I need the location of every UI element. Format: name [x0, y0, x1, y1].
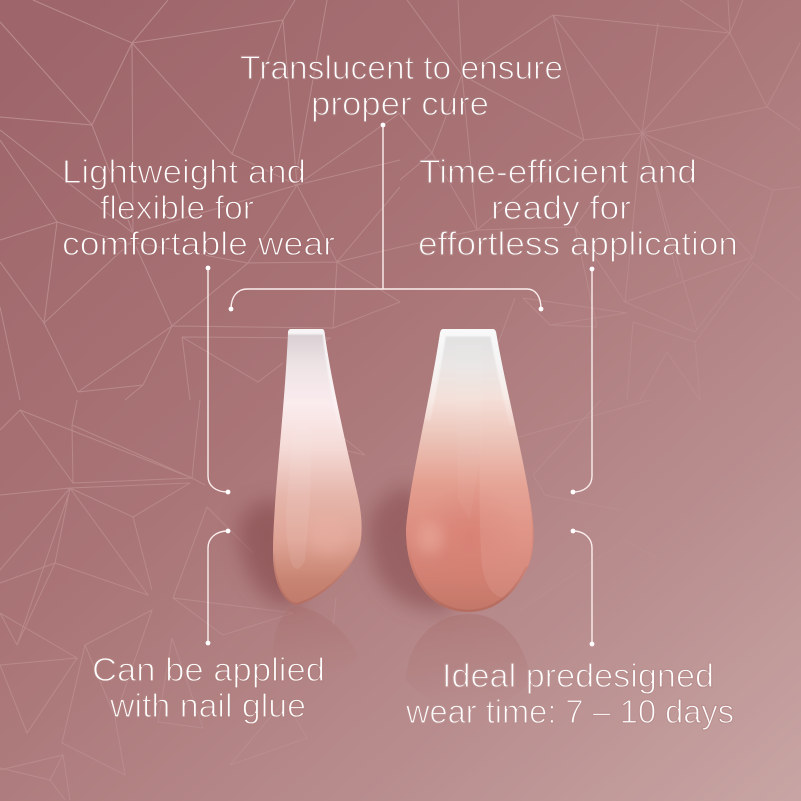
- text: time-efficient: effortless application: [418, 225, 738, 262]
- text: wear time: Ideal predesigned: [442, 657, 714, 694]
- connector: upper left: [208, 268, 228, 492]
- text: time-efficient: ready for: [491, 189, 631, 226]
- connector dots: [206, 123, 594, 646]
- connector lines: [208, 125, 592, 644]
- text: translucent: Translucent to ensure: [240, 49, 563, 86]
- text: translucent: proper cure: [311, 85, 489, 122]
- text: lightweight: Lightweight and: [62, 153, 306, 190]
- nail body: [406, 329, 534, 612]
- shadow behind right nail: [368, 485, 452, 612]
- text: wear time: wear time: 7 – 10 days: [405, 693, 734, 730]
- text: nail glue: [92, 651, 325, 724]
- reflection: left nail: [273, 606, 358, 674]
- text: lightweight: flexible for: [100, 189, 254, 226]
- text: time-efficient: [418, 153, 738, 262]
- connector: lower left: [208, 531, 228, 643]
- shadow behind left nail: [238, 500, 301, 606]
- highlight: centre band: [455, 345, 483, 520]
- connector: upper right: [573, 269, 592, 492]
- reflection: right nail: [406, 614, 531, 710]
- text: translucent: [240, 49, 563, 122]
- connector: lower right: [573, 531, 592, 644]
- connector: top: [382, 125, 384, 289]
- lower rim: [274, 562, 352, 605]
- glossy bevel on edge: [288, 329, 339, 412]
- text: lightweight: comfortable wear: [62, 225, 335, 262]
- text: nail glue: with nail glue: [109, 687, 306, 724]
- highlight: [286, 425, 312, 569]
- highlight: lower right facet: [480, 400, 532, 598]
- nail body: [273, 329, 362, 605]
- right nail: [406, 329, 534, 612]
- text: nail glue: Can be applied: [92, 651, 325, 688]
- text: lightweight: [62, 153, 335, 262]
- glow: [310, 515, 346, 555]
- glossy bevel on edge: [425, 331, 515, 425]
- centre colour: [418, 483, 522, 587]
- glow: left cheek: [417, 522, 443, 554]
- text: wear time: [405, 657, 734, 730]
- left nail: [273, 329, 362, 605]
- lower rim: [411, 564, 528, 612]
- connector: bracket: [231, 289, 541, 309]
- text: time-efficient: Time-efficient and: [419, 153, 697, 190]
